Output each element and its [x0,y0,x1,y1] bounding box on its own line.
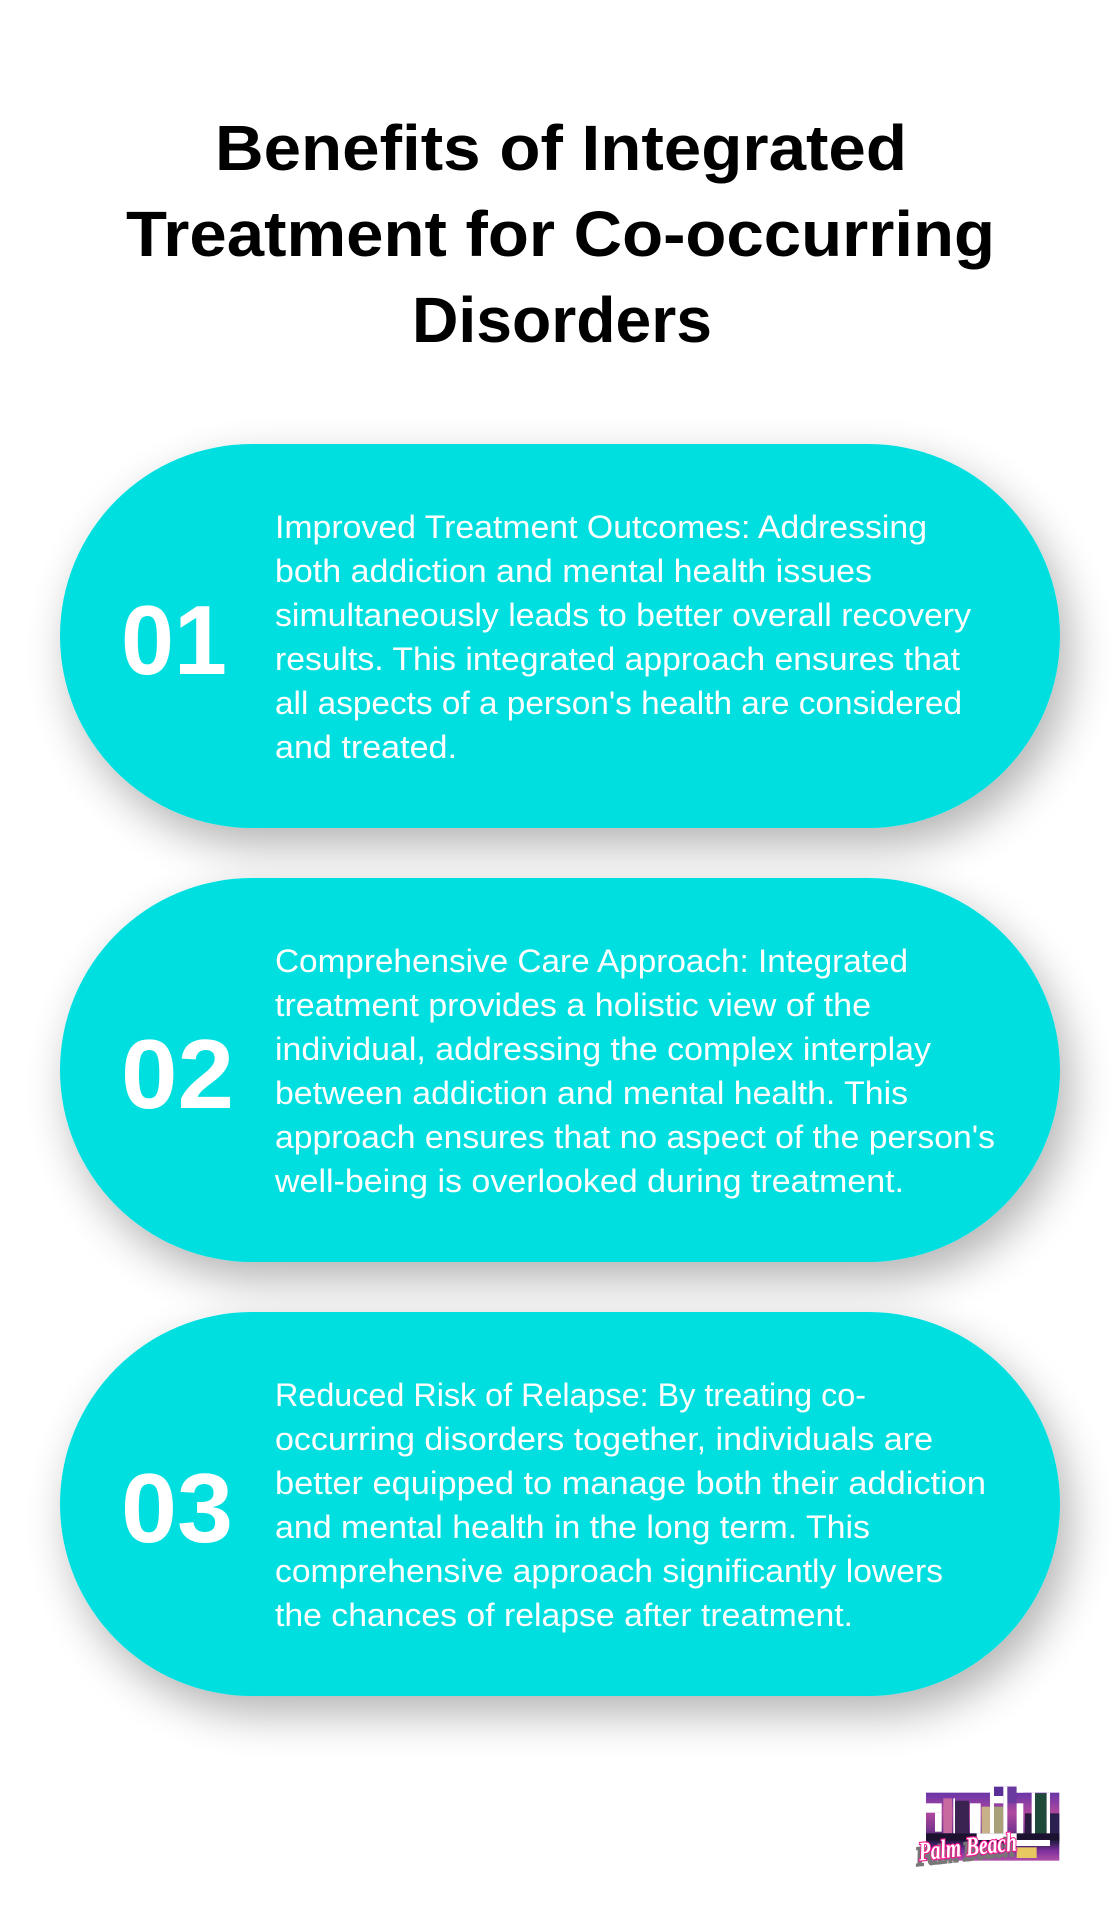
text: comprehensive care approach: between addiction and mental health. This [275,1075,908,1111]
pill background 03 [60,1312,1060,1696]
text: reduced risk of relapse: Reduced Risk of Relapse: By treating co- [275,1377,866,1413]
logo white letter cuts [926,1787,1050,1846]
text: improved treatment outcomes: Improved Treatment Outcomes: Addressing [275,509,927,545]
logo script: Palm Beach: Palm Beach [913,1831,1015,1872]
text: comprehensive care approach: approach ensures that no aspect of the person's [275,1119,995,1155]
pill background 02 [60,878,1060,1262]
text: reduced risk of relapse: and mental health in the long term. This [275,1509,870,1545]
text: comprehensive care approach: well-being is overlooked during treatment. [274,1163,904,1199]
text: improved treatment outcomes: results. This integrated approach ensures that [275,641,960,677]
text: comprehensive care approach [274,943,995,1199]
text: improved treatment outcomes: simultaneously leads to better overall recovery [275,597,971,633]
panel: benefit 01 [60,444,1060,828]
text: reduced risk of relapse: comprehensive approach significantly lowers [275,1553,943,1589]
text: comprehensive care approach: individual, addressing the complex interplay [275,1031,931,1067]
number 01: 01 [121,585,227,695]
text: reduced risk of relapse: the chances of relapse after treatment. [275,1597,853,1633]
text: comprehensive care approach: treatment provides a holistic view of the [275,987,871,1023]
title [126,112,995,356]
title: Treatment for Co-occurring [126,198,995,270]
number 03: 03 [121,1453,233,1563]
title: Benefits of Integrated [215,112,907,184]
text: improved treatment outcomes: both addiction and mental health issues [275,553,872,589]
title: Disorders [412,284,712,356]
panel: benefit 03 [60,1312,1060,1696]
text: improved treatment outcomes: and treated. [275,729,457,765]
number 02: 02 [121,1019,234,1129]
panel: benefit 02 [60,878,1060,1262]
text: improved treatment outcomes [275,509,971,765]
logo city image [926,1787,1059,1861]
pill background 01 [60,444,1060,828]
logo: Amity Palm Beach [913,1787,1059,1872]
text: comprehensive care approach: Comprehensive Care Approach: Integrated [275,943,908,979]
text: reduced risk of relapse: better equipped to manage both their addiction [275,1465,986,1501]
text: improved treatment outcomes: all aspects of a person's health are considered [275,685,962,721]
logo script: Palm Beach: Palm Beach [916,1826,1018,1867]
text: reduced risk of relapse: occurring disorders together, individuals are [275,1421,933,1457]
text: reduced risk of relapse [275,1377,986,1633]
